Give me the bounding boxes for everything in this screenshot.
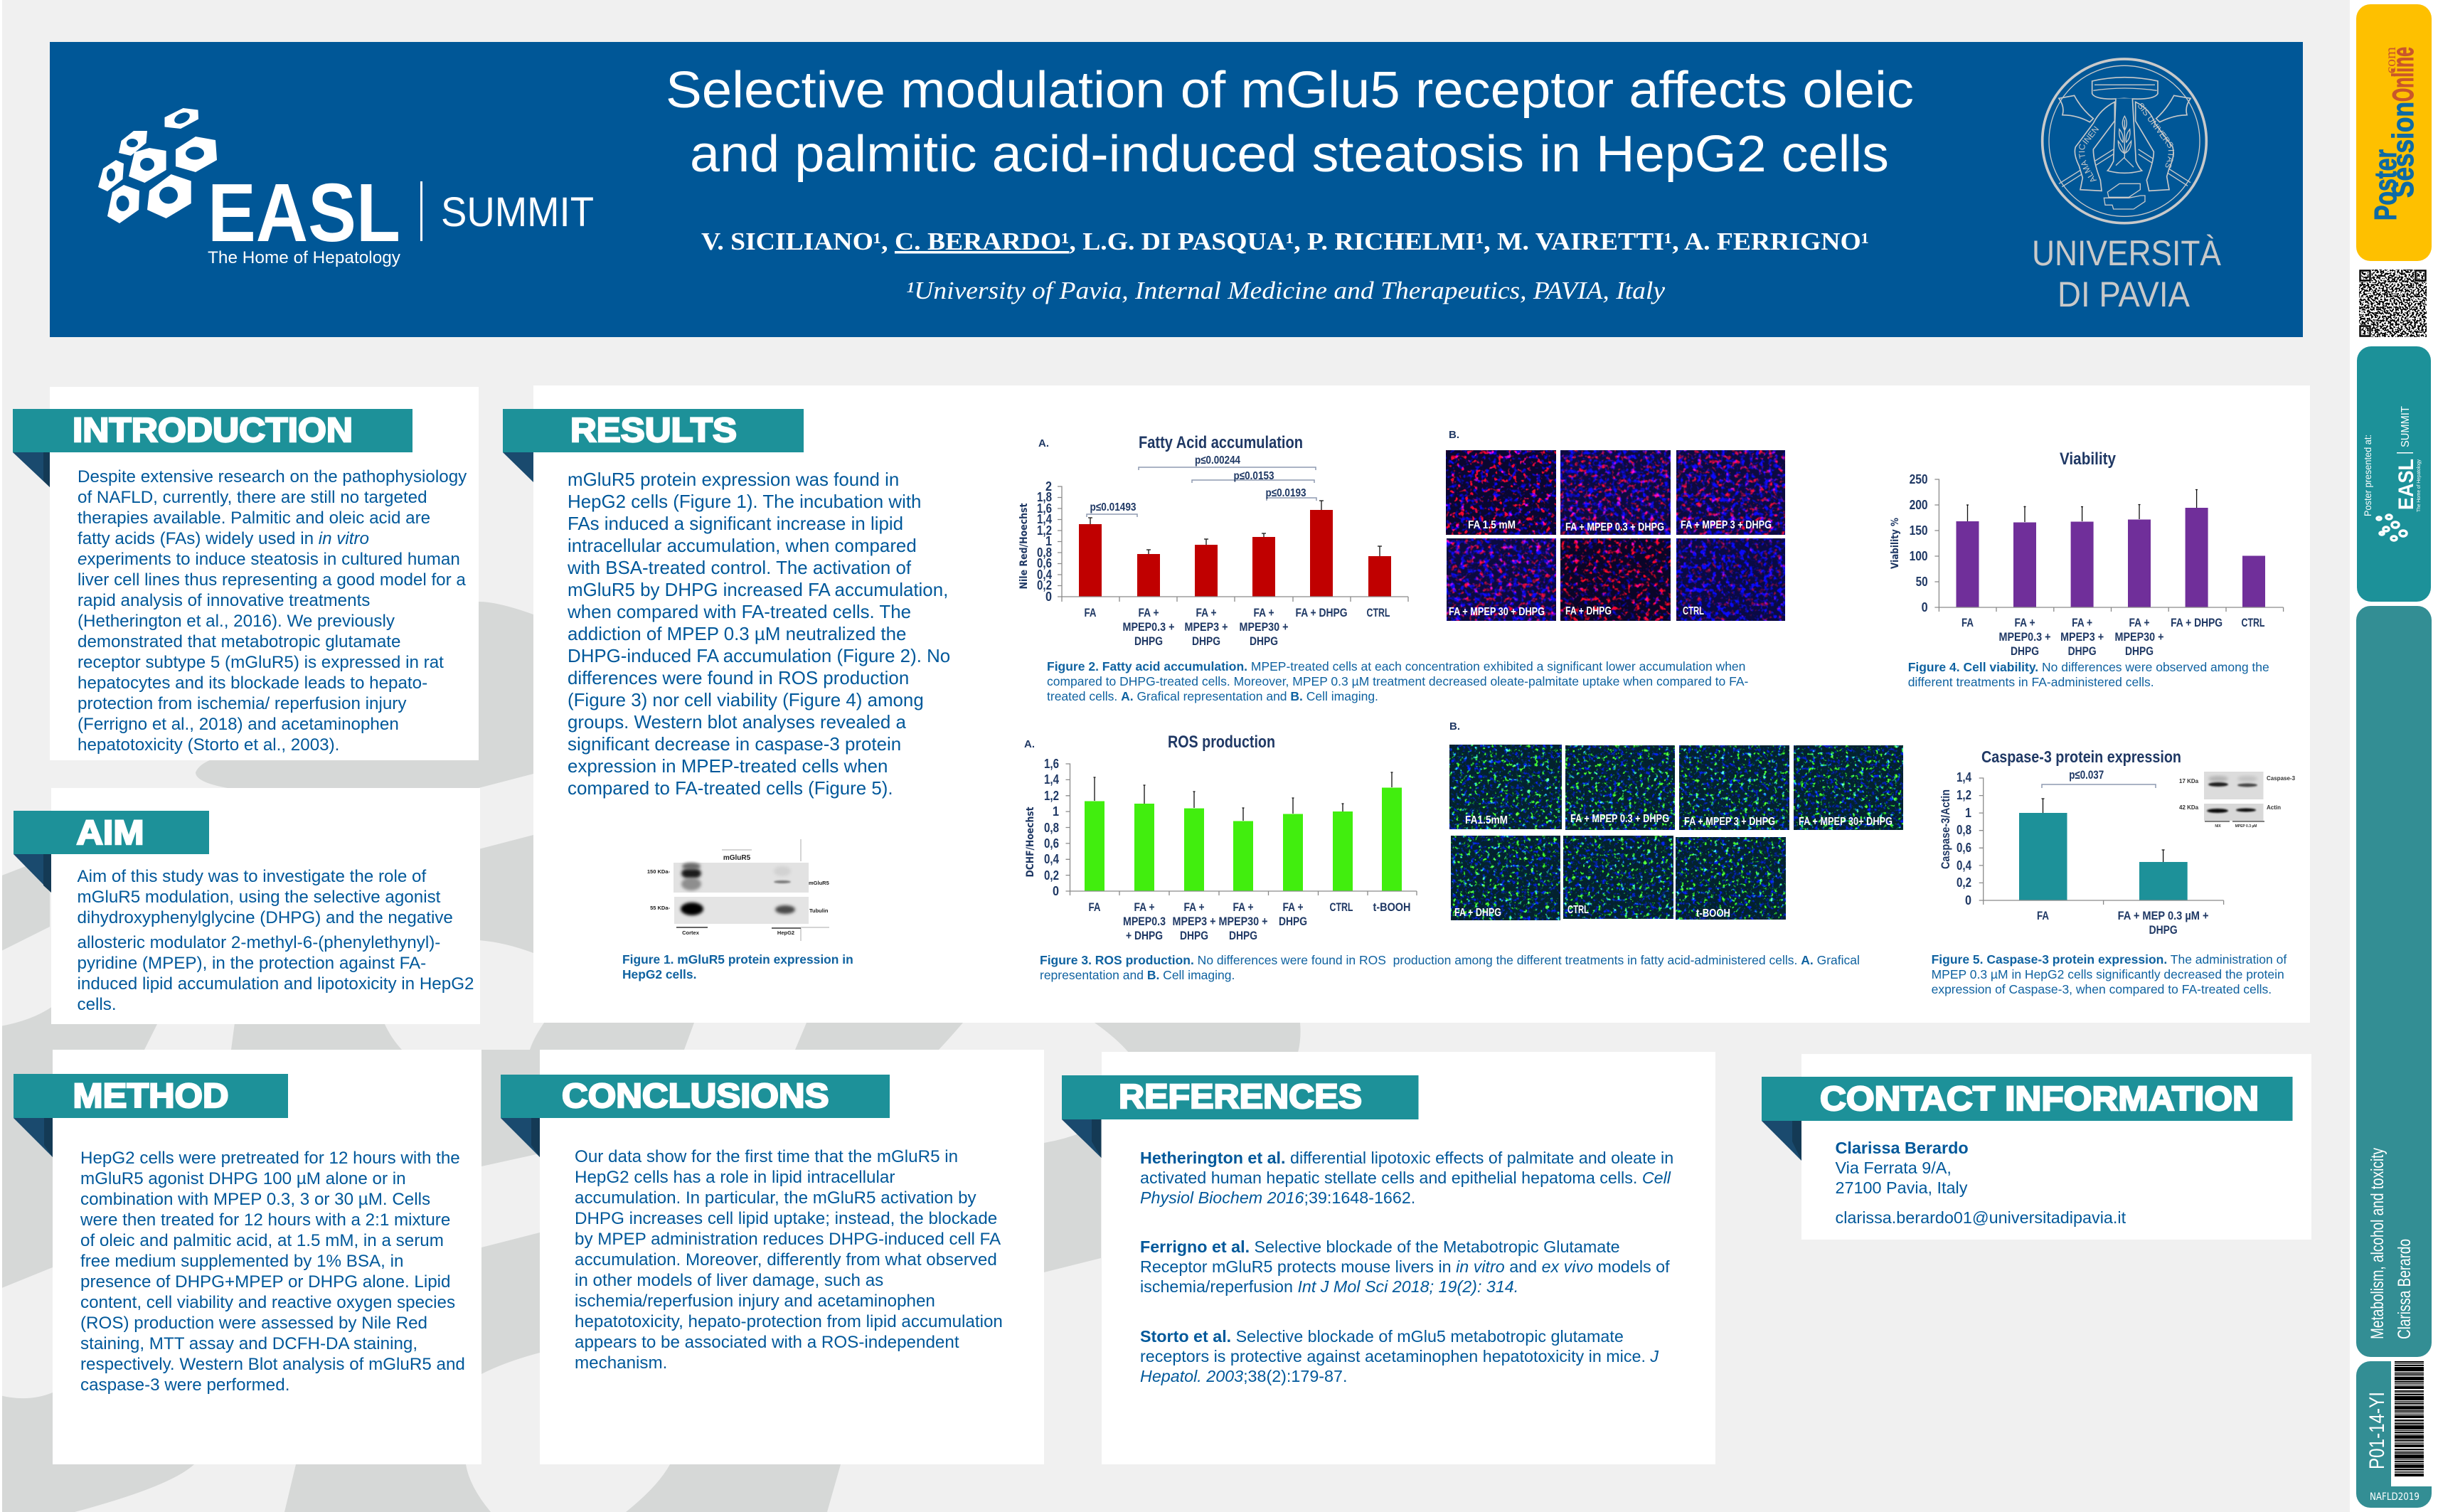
introduction text: protection from ischemia/ reperfusion injury bbox=[78, 694, 406, 713]
chart: fatty acid accumulation: 1 bbox=[1045, 534, 1052, 548]
icon: University of Pavia seal: SIS UNIVERSITAS bbox=[2138, 103, 2175, 169]
method text: were then treated for 12 hours with a 2:1 mixture bbox=[80, 1210, 450, 1229]
chart: caspase-3 protein expression: 1,2 bbox=[1957, 788, 1971, 802]
figure 1: western blot: Cortex bbox=[682, 930, 700, 936]
chart: cell viability: 200 bbox=[1910, 498, 1928, 512]
aim text: dihydroxyphenylglycine (DHPG) and the negative bbox=[77, 908, 453, 927]
figure 1: western blot: mGluR5 bbox=[809, 880, 829, 886]
chart: ROS production bbox=[1024, 733, 1417, 942]
method text bbox=[80, 1148, 465, 1395]
chart: cell viability: DHPG bbox=[2125, 644, 2154, 658]
chart: fatty acid accumulation: p≤0.0153 bbox=[1233, 470, 1274, 482]
method text: content, cell viability and reactive oxygen species bbox=[80, 1293, 455, 1311]
chart: ROS production: CTRL bbox=[1330, 900, 1353, 914]
results text: HepG2 cells (Figure 1). The incubation with bbox=[568, 492, 921, 512]
figure 5 caption: expression of Caspase-3, when compared to FA-treated cells. bbox=[1932, 981, 2272, 996]
figure 2 caption: treated cells. A. Grafical representation and B. Cell imaging. bbox=[1047, 688, 1378, 703]
micrographs: figure 3 cell imaging: B. bbox=[1449, 720, 1460, 733]
results text: when compared with FA-treated cells. The bbox=[568, 602, 911, 622]
sidebar: poster code and barcode bbox=[2356, 1361, 2432, 1508]
method text: free medium supplemented by 1% BSA, in bbox=[80, 1252, 403, 1270]
chart: fatty acid accumulation: FA + bbox=[1253, 606, 1274, 619]
chart: ROS production: ROS production bbox=[1168, 733, 1275, 752]
title: and palmitic acid-induced steatosis in HepG2 cells bbox=[690, 126, 1889, 183]
sidebar: PosterSessionOnline logo bbox=[2356, 4, 2432, 261]
chart: fatty acid accumulation: CTRL bbox=[1367, 606, 1390, 619]
micrographs: figure 2 cell imaging: FA + DHPG bbox=[1565, 605, 1612, 617]
logo tagline: The Home of Hepatology bbox=[208, 248, 400, 267]
chart: cell viability: 0 bbox=[1922, 600, 1928, 614]
results text: mGluR5 protein expression was found in bbox=[568, 470, 899, 490]
chart: ROS production: FA + bbox=[1233, 900, 1254, 914]
micrographs: figure 2 cell imaging: FA + MPEP 3 + DHPG bbox=[1681, 519, 1772, 531]
heading: results bbox=[503, 409, 804, 482]
chart: cell viability: CTRL bbox=[2242, 616, 2264, 629]
chart: fatty acid accumulation: p≤0.00244 bbox=[1195, 454, 1240, 467]
introduction text: rapid analysis of innovative treatments bbox=[78, 590, 370, 610]
micrographs: figure 2 cell imaging: FA + MPEP 0.3 + DHPG bbox=[1565, 521, 1664, 533]
chart: fatty acid accumulation: 1,6 bbox=[1037, 501, 1052, 516]
method text: presence of DHPG+MPEP or DHPG alone. Lipid bbox=[80, 1272, 451, 1292]
chart: cell viability: FA bbox=[1961, 616, 1974, 629]
chart: ROS production: 1,2 bbox=[1044, 789, 1059, 803]
conclusions text: DHPG increases cell lipid uptake; instead, the blockade bbox=[575, 1209, 997, 1228]
introduction text: therapies available. Palmitic and oleic acid are bbox=[78, 508, 430, 528]
university name bbox=[2032, 233, 2222, 314]
chart: caspase-3 protein expression: 0,8 bbox=[1957, 823, 1971, 837]
introduction text: hepatotoxicity (Storto et al., 2003). bbox=[78, 735, 339, 754]
chart: cell viability: FA + DHPG bbox=[2171, 616, 2223, 629]
micrographs: figure 2 cell imaging: FA 1.5 mM bbox=[1468, 519, 1516, 531]
aim text bbox=[77, 867, 474, 1014]
title bbox=[666, 62, 1914, 183]
introduction text: Despite extensive research on the pathophysiology bbox=[78, 467, 467, 486]
university name: UNIVERSITÀ bbox=[2032, 233, 2222, 273]
chart: fatty acid accumulation: MPEP3 + bbox=[1185, 620, 1228, 634]
chart: fatty acid accumulation: 0,2 bbox=[1037, 578, 1052, 592]
aim text: mGluR5 modulation, using the selective agonist bbox=[77, 888, 440, 907]
figure 5 caption bbox=[1932, 952, 2287, 996]
authors: V. SICILIANO¹, C. BERARDO¹ , L.G. DI PASQUA¹, P. RICHELMI¹, M. VAIRETTI¹, A. FERRIGNO¹ bbox=[701, 228, 1869, 255]
introduction text: liver cell lines thus representing a good model for a bbox=[78, 570, 466, 589]
conclusions text: by MPEP administration reduces DHPG-induced cell FA bbox=[575, 1229, 1001, 1249]
chart: cell viability: 150 bbox=[1910, 523, 1928, 538]
micrographs: figure 2 cell imaging: CTRL bbox=[1683, 605, 1704, 617]
chart: cell viability: FA + bbox=[2129, 616, 2150, 629]
sidebar: PosterSessionOnline logo: Online bbox=[2386, 47, 2420, 102]
chart: ROS production: 0 bbox=[1053, 884, 1059, 898]
results text: expression in MPEP-treated cells when bbox=[568, 757, 888, 777]
method text: HepG2 cells were pretreated for 12 hours with the bbox=[80, 1148, 460, 1168]
affiliation: ¹University of Pavia, Internal Medicine and Therapeutics, PAVIA, Italy bbox=[906, 277, 1665, 304]
sidebar bbox=[2350, 0, 2438, 1512]
figure 1: western blot: 55 KDa- bbox=[650, 905, 670, 911]
contact details: Clarissa Berardo bbox=[1835, 1139, 1969, 1157]
method text: staining, MTT assay and DCFH-DA staining, bbox=[80, 1334, 417, 1353]
figure 2 caption bbox=[1047, 659, 1748, 703]
reference: Storto et al.: Hepatol. 2003;38(2):179-87. bbox=[1140, 1367, 1347, 1385]
figure 2 caption: compared to DHPG-treated cells. Moreover, MPEP 0.3 µM treatment decreased oleate-palmitate uptake when compared to FA- bbox=[1047, 674, 1748, 688]
chart: fatty acid accumulation: Nile Red/Hoechst bbox=[1018, 503, 1030, 589]
micrographs: figure 3 cell imaging: FA + DHPG bbox=[1454, 907, 1501, 919]
chart: fatty acid accumulation: p≤0.01493 bbox=[1090, 501, 1137, 513]
reference: Ferrigno et al.: Ferrigno et al. Selective blockade of the Metabotropic Glutamate bbox=[1140, 1237, 1620, 1256]
heading: method bbox=[14, 1074, 288, 1157]
method text: (ROS) production were assessed by Nile Red bbox=[80, 1313, 427, 1333]
chart: caspase-3 protein expression: p≤0.037 bbox=[2069, 768, 2104, 782]
introduction text: (Hetherington et al., 2016). We previously bbox=[78, 612, 395, 630]
reference: Hetherington et al.: Physiol Biochem 2016;39:1648-1662. bbox=[1140, 1188, 1415, 1207]
chart: ROS production: FA + bbox=[1283, 900, 1304, 914]
heading: contact information bbox=[1762, 1077, 2293, 1161]
figure 1 caption bbox=[622, 952, 853, 981]
chart: fatty acid accumulation: 0,8 bbox=[1037, 545, 1052, 560]
chart: fatty acid accumulation: p≤0.0193 bbox=[1266, 487, 1306, 499]
results text bbox=[568, 470, 950, 799]
contact details bbox=[1835, 1138, 2126, 1228]
chart: ROS production: 0,4 bbox=[1044, 852, 1059, 866]
title: Selective modulation of mGlu5 receptor affects oleic bbox=[666, 62, 1914, 119]
heading: results: RESULTS bbox=[570, 412, 737, 449]
chart: fatty acid accumulation: 1,8 bbox=[1037, 490, 1052, 504]
sidebar: PosterSessionOnline logo: Session bbox=[2386, 102, 2420, 198]
sidebar: PosterSessionOnline logo: .com bbox=[2383, 47, 2399, 78]
reference: Storto et al.: Storto et al. Selective blockade of mGlu5 metabotropic glutamate bbox=[1140, 1327, 1624, 1346]
chart: caspase-3 protein expression: Caspase-3 protein expression bbox=[1981, 747, 2181, 766]
aim text: Aim of this study was to investigate the role of bbox=[77, 867, 426, 886]
icon: EASL hexagon logo bbox=[98, 108, 217, 223]
chart: cell viability: 50 bbox=[1916, 575, 1928, 589]
sidebar: presented at EASL Summit: Poster presented at: bbox=[2362, 435, 2373, 516]
chart: fatty acid accumulation: DHPG bbox=[1192, 634, 1220, 648]
chart: cell viability: MPEP0.3 + bbox=[1998, 630, 2051, 644]
reference: Ferrigno et al. bbox=[1140, 1237, 1670, 1297]
reference: Hetherington et al.: activated human hepatic stellate cells and epithelial hepatoma cells. Cell bbox=[1140, 1168, 1671, 1187]
micrographs: figure 3 cell imaging: FA1.5mM bbox=[1465, 814, 1508, 826]
chart: fatty acid accumulation: 1,2 bbox=[1037, 523, 1052, 538]
aim text: allosteric modulator 2-methyl-6-(phenylethynyl)- bbox=[77, 933, 440, 952]
chart: fatty acid accumulation: Fatty Acid accumulation bbox=[1139, 433, 1303, 452]
results text: (Figure 3) nor cell viability (Figure 4) among bbox=[568, 691, 924, 710]
results text: mGluR5 by DHPG increased FA accumulation, bbox=[568, 580, 948, 600]
micrographs: figure 3 cell imaging bbox=[1449, 720, 1903, 920]
introduction text: fatty acids (FAs) widely used in in vitro bbox=[78, 529, 369, 548]
chart: fatty acid accumulation: MPEP30 + bbox=[1239, 620, 1289, 634]
figure 5 caption: Figure 5. Caspase-3 protein expression. The administration of bbox=[1932, 952, 2287, 966]
introduction text: (Ferrigno et al., 2018) and acetaminophen bbox=[78, 714, 399, 734]
chart: fatty acid accumulation: DHPG bbox=[1134, 634, 1163, 648]
sidebar: PosterSessionOnline logo: Poster bbox=[2368, 149, 2403, 220]
conclusions text: hepatotoxicity, hepato-protection from lipid accumulation bbox=[575, 1311, 1003, 1331]
figure 3 caption: representation and B. Cell imaging. bbox=[1040, 967, 1235, 981]
figure 1: western blot bbox=[647, 839, 829, 941]
chart: ROS production: FA + bbox=[1183, 900, 1205, 914]
figure 1: western blot: HepG2 bbox=[777, 930, 794, 936]
conclusions text: HepG2 cells has a role in lipid intracellular bbox=[575, 1168, 895, 1186]
chart: caspase-3 protein expression: FA bbox=[2037, 909, 2049, 922]
results text: with BSA-treated control. The activation of bbox=[568, 558, 911, 578]
heading: introduction: INTRODUCTION bbox=[73, 412, 353, 449]
chart: ROS production: A. bbox=[1024, 738, 1035, 750]
heading: aim bbox=[14, 811, 209, 893]
chart: cell viability: 100 bbox=[1910, 549, 1928, 563]
logo divider bbox=[420, 181, 422, 241]
chart: fatty acid accumulation: FA + DHPG bbox=[1296, 606, 1347, 619]
micrographs: figure 3 cell imaging: t-BOOH bbox=[1696, 907, 1730, 920]
chart: cell viability: DHPG bbox=[2068, 644, 2097, 658]
conclusions text: ischemia/reperfusion injury and acetaminophen bbox=[575, 1292, 935, 1310]
chart: ROS production: 1,6 bbox=[1044, 757, 1059, 771]
reference: Storto et al.: receptors is protective against acetaminophen hepatotoxicity in mice. J bbox=[1140, 1347, 1659, 1365]
figure 4 caption: Figure 4. Cell viability. No differences were observed among the bbox=[1908, 660, 2269, 674]
chart: fatty acid accumulation: 0 bbox=[1045, 590, 1052, 604]
panel: references bbox=[1062, 1052, 1715, 1464]
reference: Hetherington et al. bbox=[1140, 1148, 1673, 1208]
panel: contact information bbox=[1762, 1054, 2311, 1240]
chart: ROS production: DCHF/Hoechst bbox=[1025, 806, 1036, 878]
results text: intracellular accumulation, when compared bbox=[568, 536, 917, 556]
chart: cell viability: DHPG bbox=[2011, 644, 2039, 658]
introduction text: receptor subtype 5 (mGluR5) is expressed in rat bbox=[78, 653, 444, 671]
sidebar: poster code and barcode: NAFLD2019 bbox=[2370, 1491, 2420, 1503]
chart: caspase-3 protein expression bbox=[1939, 747, 2224, 937]
figure 1: western blot: mGluR5 bbox=[723, 854, 751, 862]
chart: caspase-3 protein expression: Caspase-3/Actin bbox=[1939, 789, 1952, 869]
icon: University of Pavia seal bbox=[2041, 58, 2208, 225]
sidebar: presented at EASL Summit bbox=[2357, 346, 2431, 602]
heading: references: REFERENCES bbox=[1119, 1078, 1362, 1116]
chart: ROS production: MPEP0.3 bbox=[1123, 915, 1166, 928]
results text: groups. Western blot analyses revealed a bbox=[568, 713, 906, 733]
chart: ROS production: DHPG bbox=[1279, 915, 1307, 928]
chart: fatty acid accumulation: 0,6 bbox=[1037, 556, 1052, 570]
micrographs: figure 2 cell imaging: FA + MPEP 30 + DHPG bbox=[1449, 606, 1545, 618]
method text: combination with MPEP 0.3, 3 or 30 µM. Cells bbox=[80, 1189, 430, 1209]
heading: conclusions bbox=[501, 1075, 890, 1157]
SUMMIT label: SUMMIT bbox=[441, 189, 594, 235]
chart: ROS production: MPEP3 + bbox=[1172, 915, 1216, 928]
results text: significant decrease in caspase-3 protein bbox=[568, 735, 901, 755]
panel: aim bbox=[14, 788, 480, 1024]
aim text: induced lipid accumulation and lipotoxicity in HepG2 bbox=[77, 974, 474, 994]
introduction text: experiments to induce steatosis in cultured human bbox=[78, 549, 460, 569]
figure 4 caption bbox=[1908, 660, 2269, 688]
micrographs: figure 3 cell imaging: FA + MPEP 3 + DHPG bbox=[1684, 816, 1775, 828]
micrographs: figure 3 cell imaging: CTRL bbox=[1567, 904, 1589, 916]
figure 3 caption: Figure 3. ROS production. No differences were found in ROS production among the different treatments in fatty acid-administered cells. A. Grafical bbox=[1040, 953, 1860, 967]
chart: ROS production: 1 bbox=[1053, 804, 1059, 819]
results text: DHPG-induced FA accumulation (Figure 2). No bbox=[568, 646, 950, 666]
figure 1 caption: HepG2 cells. bbox=[622, 967, 696, 981]
figure 1: western blot: Tubulin bbox=[809, 907, 829, 914]
heading: conclusions: CONCLUSIONS bbox=[562, 1077, 829, 1115]
sidebar: session and author: Clarissa Berardo bbox=[2395, 1239, 2415, 1339]
sidebar: poster code and barcode: P01-14-YI bbox=[2365, 1392, 2389, 1469]
header banner bbox=[50, 42, 2303, 337]
results text: FAs induced a significant increase in lipid bbox=[568, 514, 903, 534]
chart: cell viability: Viability bbox=[2060, 449, 2117, 469]
chart: ROS production: DHPG bbox=[1180, 929, 1208, 942]
method text: mGluR5 agonist DHPG 100 µM alone or in bbox=[80, 1169, 406, 1188]
university name: DI PAVIA bbox=[2058, 275, 2191, 314]
chart: caspase-3 protein expression: FA + MEP 0.3 µM + bbox=[2118, 909, 2209, 922]
sidebar: presented at EASL Summit: SUMMIT bbox=[2400, 406, 2412, 447]
chart: caspase-3 protein expression: DHPG bbox=[2149, 923, 2178, 937]
heading: introduction bbox=[13, 409, 412, 487]
micrographs: figure 3 cell imaging: FA + MPEP 30+ DHPG bbox=[1799, 816, 1893, 828]
chart: ROS production: FA bbox=[1088, 900, 1101, 914]
chart: fatty acid accumulation bbox=[1018, 433, 1408, 648]
chart: fatty acid accumulation: MPEP0.3 + bbox=[1122, 620, 1175, 634]
results text: compared to FA-treated cells (Figure 5). bbox=[568, 779, 893, 799]
chart: caspase-3 protein expression: 0,6 bbox=[1957, 841, 1971, 855]
results text: differences were found in ROS production bbox=[568, 669, 909, 688]
heading: aim: AIM bbox=[77, 814, 144, 852]
chart: caspase-3 protein expression: 0,2 bbox=[1957, 875, 1971, 890]
method text: respectively. Western Blot analysis of mGluR5 and bbox=[80, 1354, 465, 1374]
introduction text bbox=[78, 467, 467, 754]
figure 3 caption bbox=[1040, 953, 1860, 981]
micrographs: figure 2 cell imaging bbox=[1446, 429, 1785, 621]
sidebar: session and author: Metabolism, alcohol and toxicity bbox=[2368, 1148, 2388, 1339]
introduction text: demonstrated that metabotropic glutamate bbox=[78, 632, 400, 651]
sidebar: QR code bbox=[2359, 270, 2427, 337]
sidebar: presented at EASL Summit: The Home of Hepatology bbox=[2417, 459, 2422, 512]
conclusions text bbox=[575, 1146, 1003, 1373]
chart: caspase-3 protein expression: 0,4 bbox=[1957, 858, 1971, 873]
panel: results bbox=[503, 385, 2310, 1023]
conclusions text: accumulation. In particular, the mGluR5 activation by bbox=[575, 1188, 976, 1208]
heading: references bbox=[1062, 1075, 1418, 1158]
caspase-3 western blot inset: NIX bbox=[2215, 824, 2221, 829]
panel: method bbox=[14, 1050, 481, 1464]
chart: cell viability: Viability % bbox=[1890, 518, 1901, 569]
chart: caspase-3 protein expression: 1 bbox=[1965, 806, 1971, 820]
caspase-3 western blot inset bbox=[2179, 772, 2296, 829]
figure 1 caption: Figure 1. mGluR5 protein expression in bbox=[622, 952, 853, 966]
chart: ROS production: 0,8 bbox=[1044, 821, 1059, 835]
chart: fatty acid accumulation: 0,4 bbox=[1037, 568, 1052, 582]
panel: conclusions bbox=[501, 1050, 1044, 1464]
method text: caspase-3 were performed. bbox=[80, 1375, 289, 1394]
contact details: Via Ferrata 9/A, bbox=[1835, 1159, 1952, 1177]
chart: ROS production: + DHPG bbox=[1126, 929, 1163, 942]
chart: fatty acid accumulation: DHPG bbox=[1250, 634, 1278, 648]
chart: caspase-3 protein expression: 1,4 bbox=[1957, 770, 1971, 784]
chart: cell viability: 250 bbox=[1910, 472, 1928, 486]
chart: fatty acid accumulation: 1,4 bbox=[1037, 512, 1052, 526]
conclusions text: appears to be associated with a ROS-independent bbox=[575, 1333, 959, 1351]
chart: ROS production: t-BOOH bbox=[1373, 900, 1411, 914]
charts and micrographs bbox=[1018, 429, 2296, 942]
introduction text: of NAFLD, currently, there are still no targeted bbox=[78, 488, 427, 506]
conclusions text: in other models of liver damage, such as bbox=[575, 1270, 883, 1290]
micrographs: figure 3 cell imaging: FA + MPEP 0.3 + DHPG bbox=[1570, 813, 1669, 825]
sidebar: session and author bbox=[2356, 606, 2432, 1357]
chart: ROS production: DHPG bbox=[1229, 929, 1257, 942]
conclusions text: accumulation. Moreover, differently from what observed bbox=[575, 1250, 997, 1269]
chart: ROS production: 0,6 bbox=[1044, 836, 1059, 851]
chart: fatty acid accumulation: A. bbox=[1038, 437, 1049, 449]
chart: fatty acid accumulation: FA + bbox=[1138, 606, 1159, 619]
sidebar: presented at EASL Summit: EASL bbox=[2395, 459, 2418, 510]
chart: ROS production: MPEP30 + bbox=[1219, 915, 1268, 928]
heading: method: METHOD bbox=[73, 1077, 229, 1115]
caspase-3 western blot inset: 42 KDa bbox=[2179, 804, 2199, 811]
chart: cell viability: MPEP3 + bbox=[2060, 630, 2104, 644]
aim text: pyridine (MPEP), in the protection against FA- bbox=[77, 954, 426, 973]
panel: introduction bbox=[13, 387, 479, 760]
icon: University of Pavia seal: ALMA TICINEN bbox=[2078, 126, 2099, 182]
introduction text: hepatocytes and its blockade leads to hepato- bbox=[78, 673, 427, 693]
chart: caspase-3 protein expression: 0 bbox=[1965, 893, 1971, 907]
chart: cell viability: FA + bbox=[2072, 616, 2092, 629]
chart: fatty acid accumulation: FA bbox=[1084, 606, 1097, 619]
reference: Storto et al. bbox=[1140, 1326, 1659, 1386]
results text: addiction of MPEP 0.3 µM neutralized the bbox=[568, 624, 906, 644]
conclusions text: Our data show for the first time that the mGluR5 in bbox=[575, 1146, 958, 1166]
conclusions text: mechanism. bbox=[575, 1353, 667, 1373]
chart: ROS production: FA + bbox=[1134, 900, 1155, 914]
method text: of oleic and palmitic acid, at 1.5 mM, in a serum bbox=[80, 1230, 444, 1250]
chart: ROS production: 0,2 bbox=[1044, 868, 1059, 883]
reference: Ferrigno et al.: ischemia/reperfusion Int J Mol Sci 2018; 19(2): 314. bbox=[1140, 1277, 1518, 1296]
micrographs: figure 2 cell imaging: B. bbox=[1449, 429, 1459, 441]
chart: fatty acid accumulation: 2 bbox=[1045, 479, 1052, 494]
contact details: clarissa.berardo01@universitadipavia.it bbox=[1835, 1208, 2126, 1227]
EASL logo wordmark: EASL bbox=[208, 166, 400, 259]
caspase-3 western blot inset: Actin bbox=[2267, 804, 2281, 811]
caspase-3 western blot inset: MPEP 0.3 µM bbox=[2235, 824, 2257, 829]
figure 5 caption: MPEP 0.3 µM in HepG2 cells significantly decreased the protein bbox=[1932, 967, 2284, 981]
chart: cell viability: MPEP30 + bbox=[2115, 630, 2164, 644]
figure 2 caption: Figure 2. Fatty acid accumulation. MPEP-treated cells at each concentration exhibited a significant lower accumulation when bbox=[1047, 659, 1745, 673]
reference: Ferrigno et al.: Receptor mGluR5 protects mouse livers in in vitro and ex vivo models of bbox=[1140, 1257, 1670, 1276]
chart: cell viability: FA + bbox=[2014, 616, 2035, 629]
aim text: cells. bbox=[77, 995, 117, 1014]
chart: ROS production: 1,4 bbox=[1044, 772, 1059, 787]
chart: fatty acid accumulation: FA + bbox=[1196, 606, 1217, 619]
reference: Hetherington et al.: Hetherington et al. differential lipotoxic effects of palmitate and oleate in bbox=[1140, 1149, 1673, 1167]
figure 1: western blot: 150 KDa- bbox=[647, 868, 670, 875]
figure 4 caption: different treatments in FA-administered cells. bbox=[1908, 674, 2154, 688]
chart: cell viability bbox=[1890, 449, 2284, 658]
heading: contact information: CONTACT INFORMATION bbox=[1820, 1080, 2259, 1118]
contact details: 27100 Pavia, Italy bbox=[1835, 1178, 1967, 1197]
caspase-3 western blot inset: 17 KDa bbox=[2179, 778, 2199, 784]
caspase-3 western blot inset: Caspase-3 bbox=[2267, 775, 2296, 782]
